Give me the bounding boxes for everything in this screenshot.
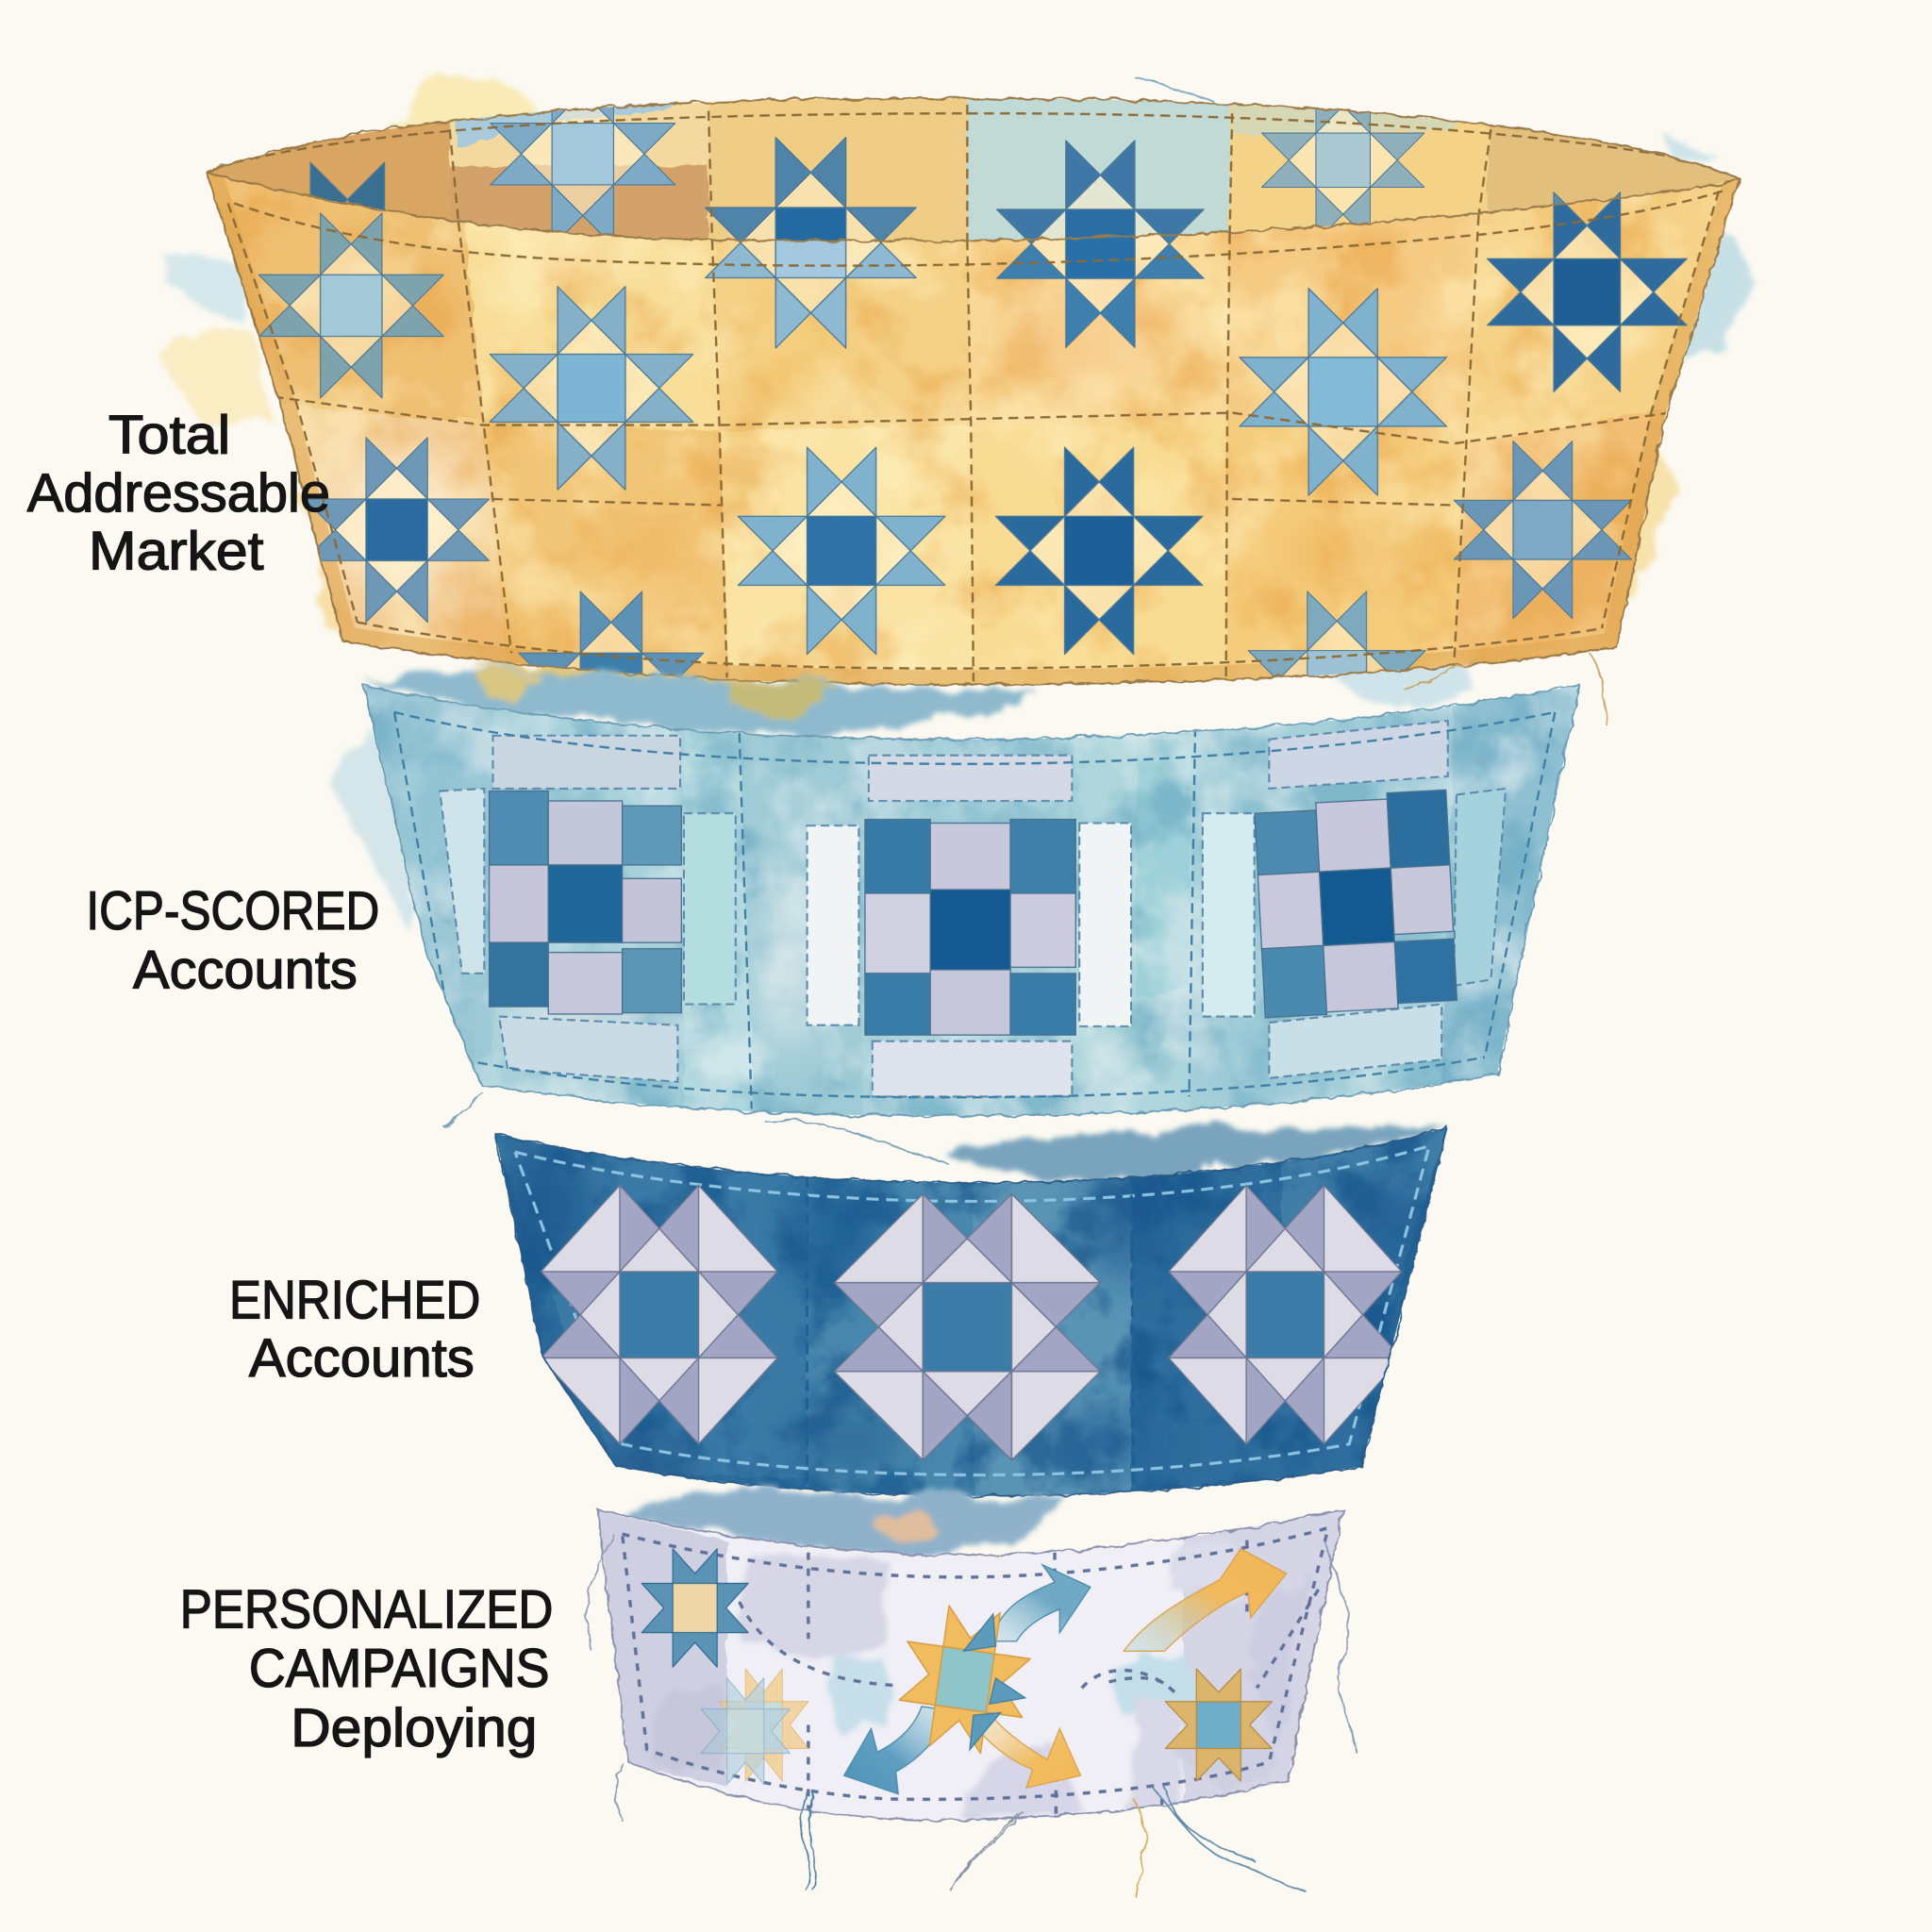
panel: personalized campaigns quilt tier (579, 1491, 1368, 1897)
label: ICP-scored accounts: ICP-SCORED (86, 881, 379, 941)
label: personalized campaigns deploying: CAMPAIGNS (249, 1639, 550, 1699)
label: total addressable market: Addressable (27, 463, 330, 524)
label: enriched accounts: Accounts (249, 1328, 475, 1389)
lavender and pale blue watercolor blooms (647, 1541, 1306, 1818)
arrow: blue up-right (991, 1565, 1091, 1641)
hanging threads (587, 1509, 1356, 1897)
lavender ground (579, 1491, 1368, 1836)
indigo patchwork ground (496, 1127, 1448, 1496)
panel: total addressable market quilt tier (160, 61, 1762, 776)
dark indigo blooms on ground (492, 1146, 1441, 1491)
icon: central star (893, 1601, 1036, 1758)
icon: star lower right (1165, 1669, 1272, 1781)
panel: ICP-scored accounts quilt tier (333, 665, 1602, 1164)
label: personalized campaigns deploying: PERSONALIZED (180, 1579, 553, 1640)
label: ICP-scored accounts (86, 881, 379, 1001)
connecting wash to campaigns tier (604, 1491, 1072, 1555)
label: total addressable market (27, 406, 330, 581)
enriched tier stitching (515, 1146, 1429, 1485)
label: ICP-scored accounts: Accounts (133, 941, 358, 1001)
pale watercolor blooms on teal ground (394, 715, 1466, 1091)
diamond star blocks (541, 1185, 1402, 1460)
connecting wash between top and second tier (333, 671, 1035, 937)
label: personalized campaigns deploying: Deploying (291, 1698, 537, 1758)
label: enriched accounts: ENRICHED (229, 1271, 480, 1331)
icon: faded star lower left (701, 1669, 808, 1785)
label: personalized campaigns deploying (180, 1579, 553, 1758)
nine-patch block right (1254, 790, 1457, 1018)
teal patchwork ground (363, 685, 1579, 1117)
arrow: orange up-right (1124, 1549, 1287, 1651)
second tier stitching and threads (394, 712, 1555, 1109)
watercolor blooms on the front wall (207, 173, 1740, 685)
back wall patches (209, 98, 1736, 242)
icon: star top left (641, 1549, 748, 1667)
label: total addressable market: Total (108, 406, 230, 466)
lavender and white sashing strips (440, 721, 1506, 1096)
stitching on campaigns tier (623, 1528, 1328, 1821)
back wall stars (237, 61, 1687, 391)
label: total addressable market: Market (89, 521, 264, 581)
front wall star blocks (215, 194, 1736, 685)
enriched tier outline (495, 1127, 1448, 1496)
label: enriched accounts (229, 1271, 480, 1389)
arrow: orange down-right (979, 1715, 1080, 1788)
top tier outline and loose threads (207, 76, 1740, 727)
connecting wash to enriched tier (949, 1125, 1448, 1180)
panel: enriched accounts quilt tier (480, 1109, 1466, 1516)
nine-patch block center (865, 820, 1075, 1035)
nine-patch block left (490, 791, 681, 1014)
front wall patches (208, 174, 1738, 685)
watercolor washes behind the top tier (160, 73, 1756, 708)
arrow: blue down-left (844, 1707, 949, 1794)
